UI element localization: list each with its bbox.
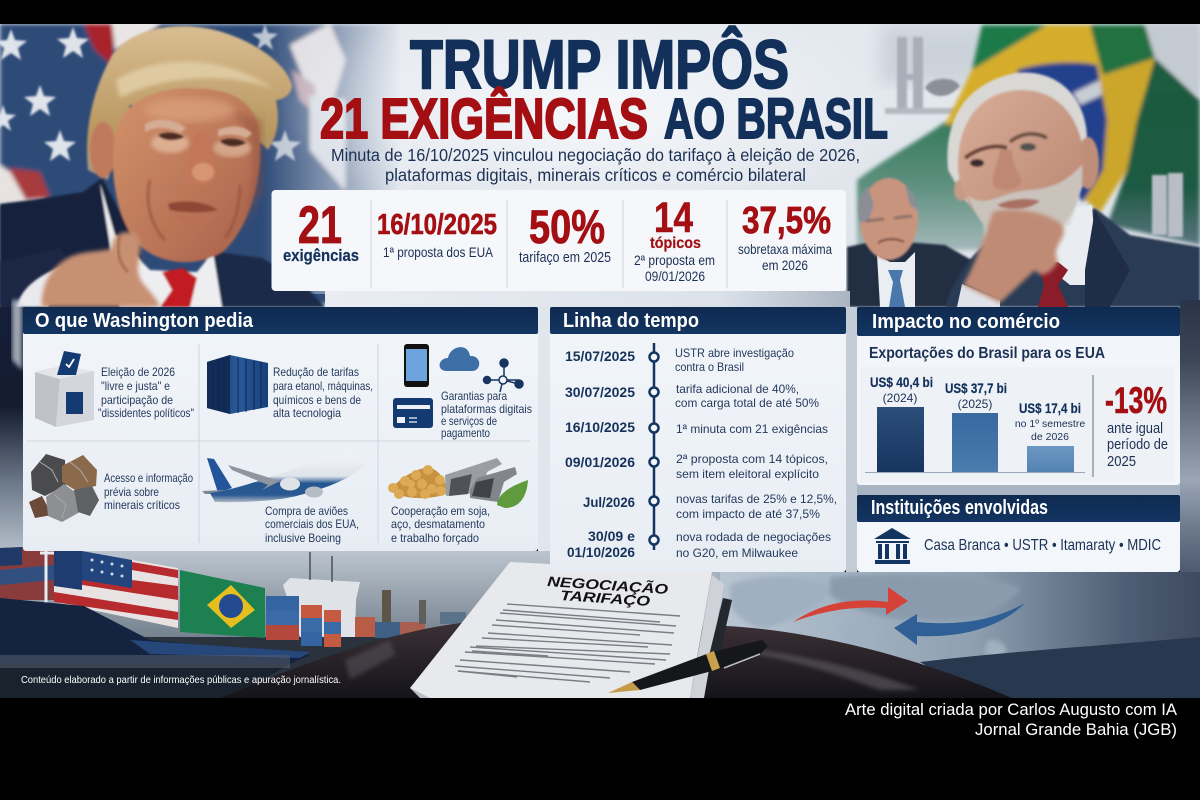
panel: Instituições envolvidas xyxy=(857,495,1180,572)
panel: O que Washington pedia xyxy=(23,307,538,551)
stat: 16/10/2025 xyxy=(377,209,497,260)
stat: 37,5%: em 2026 xyxy=(762,257,808,273)
panel heading xyxy=(550,307,846,334)
panel heading xyxy=(23,307,538,334)
stat: 14 tópicos: 2ª proposta em xyxy=(634,252,715,268)
background: Brasilia congress and Brazilian flag xyxy=(286,24,1200,252)
event: 30/07/2025: tarifa adicional de 40%, xyxy=(676,382,799,396)
stacked containers xyxy=(266,596,425,647)
icon: ballot box xyxy=(35,351,94,427)
text: plataformas xyxy=(441,389,532,440)
text: tarifas xyxy=(273,365,373,420)
icon: network xyxy=(484,359,523,392)
event: 15/07/2025 xyxy=(565,346,794,374)
bar 2025: US$ 37,7 bi xyxy=(945,380,1007,396)
stat: 14 tópicos: tópicos xyxy=(650,235,701,252)
event: 30/09 e 01/10/2026: no G20, em Milwaukee xyxy=(676,546,798,560)
callout: -13%: ante igual xyxy=(1107,420,1163,437)
event: 30/09 e 01/10/2026: 30/09 e xyxy=(588,528,635,544)
title: 21 EXIGÊNCIAS xyxy=(320,86,648,151)
event: Jul/2026: Jul/2026 xyxy=(583,494,635,510)
hull xyxy=(0,598,310,664)
text: aviões: Compra de aviões xyxy=(265,504,348,518)
pen xyxy=(608,640,768,693)
stat: 14 tópicos: 09/01/2026 xyxy=(645,268,705,284)
bar first half 2026: no 1º semestre xyxy=(1015,418,1085,430)
document: negotiation papers: TARIFAÇO xyxy=(560,587,651,609)
stat: 37,5%: 37,5% xyxy=(742,200,831,242)
text: aviões: inclusive Boeing xyxy=(265,531,341,545)
credit: Arte digital criada por Carlos Augusto com IA xyxy=(845,701,1177,719)
credit xyxy=(845,701,1177,739)
stat: 21 exigências: exigências xyxy=(283,246,359,265)
chart heading: Exportações do Brasil para os EUA xyxy=(869,345,1105,362)
document: negotiation papers xyxy=(410,562,732,698)
subtitle: plataformas digitais, minerais críticos e comércio bilateral xyxy=(385,165,806,185)
text: eleição: "dissidentes políticos" xyxy=(98,406,194,420)
event: Jul/2026: com impacto de até 37,5% xyxy=(676,507,820,521)
text: aviões xyxy=(265,504,359,545)
subtitle xyxy=(331,145,860,185)
text: tarifas: alta tecnologia xyxy=(273,406,341,420)
credit: Jornal Grande Bahia (JGB) xyxy=(975,721,1177,739)
panel: Impacto no comércio xyxy=(857,307,1180,485)
icon: soy, steel and leaf xyxy=(388,458,528,508)
text: minerais: prévia sobre xyxy=(104,485,159,499)
stat: 37,5% xyxy=(738,200,832,273)
bar 2025 xyxy=(945,380,1007,472)
panel heading: O que Washington pedia xyxy=(35,310,254,332)
text: eleição: participação de xyxy=(101,393,173,407)
lower background: ships, sea and map xyxy=(0,291,1200,698)
icon: payment card xyxy=(393,398,433,428)
bar 2024: US$ 40,4 bi xyxy=(870,374,933,390)
callout: -13%: período de xyxy=(1107,436,1168,453)
text: plataformas: plataformas digitais xyxy=(441,402,532,416)
stat: 21 exigências xyxy=(283,196,359,265)
event: 30/09 e 01/10/2026 xyxy=(567,528,831,560)
bar first half 2026: US$ 17,4 bi xyxy=(1019,400,1081,416)
stat: 16/10/2025: 16/10/2025 xyxy=(377,209,497,241)
portrait: Mauro Vieira xyxy=(847,178,975,307)
subtitle: Minuta de 16/10/2025 vinculou negociação do tarifaço à eleição de 2026, xyxy=(331,145,860,165)
hero artwork background xyxy=(0,0,1200,314)
event: 09/01/2026: 09/01/2026 xyxy=(565,454,635,470)
bar 2024 xyxy=(870,374,933,472)
text: plataformas: e serviços de xyxy=(441,414,497,428)
title: TRUMP IMPÔS xyxy=(410,26,789,103)
background: world map xyxy=(720,572,1200,666)
Brazil flag container xyxy=(180,570,265,638)
panel heading: Instituições envolvidas xyxy=(871,497,1048,519)
icon: cloud xyxy=(440,347,479,371)
title xyxy=(320,26,888,151)
text: cooperação xyxy=(391,504,490,545)
text: tarifas: para etanol, máquinas, xyxy=(273,379,373,393)
event: 15/07/2025: contra o Brasil xyxy=(675,360,744,374)
callout: -13%: 2025 xyxy=(1107,453,1136,470)
text: eleição: "livre e justa" e xyxy=(101,379,170,393)
icon: critical minerals xyxy=(29,454,99,522)
text: tarifas: químicos e bens de xyxy=(273,393,361,407)
portrait: Lula xyxy=(945,72,1200,307)
event: 16/10/2025 xyxy=(565,419,828,436)
panel heading xyxy=(857,307,1180,336)
event: 30/09 e 01/10/2026: nova rodada de negociações xyxy=(676,530,831,544)
text: minerais: Acesso e informação xyxy=(104,471,193,485)
stat: 14 tópicos: 14 xyxy=(654,194,693,242)
panel heading xyxy=(857,495,1180,522)
background: sea on the right xyxy=(920,637,1200,698)
text: cooperação: e trabalho forçado xyxy=(391,531,479,545)
text: minerais: minerais críticos xyxy=(104,498,180,512)
stat: 16/10/2025: 1ª proposta dos EUA xyxy=(383,244,494,260)
US flag container xyxy=(54,546,178,628)
document: negotiation papers: NEGOCIAÇÃO xyxy=(547,572,669,597)
callout: -13%: -13% xyxy=(1105,380,1167,421)
bar chart xyxy=(860,367,1175,482)
arrow: blue, towards the left xyxy=(894,603,1025,645)
icon: shipping container xyxy=(207,355,268,414)
title: AO BRASIL xyxy=(664,87,888,151)
event: 09/01/2026: sem item eleitoral explícito xyxy=(676,467,819,481)
event: 15/07/2025: USTR abre investigação xyxy=(675,346,794,360)
bar first half 2026: de 2026 xyxy=(1031,431,1069,443)
stat: 50%: tarifaço em 2025 xyxy=(519,250,611,266)
callout: -13% xyxy=(1105,380,1168,470)
timeline axis xyxy=(650,343,658,550)
background: American flag xyxy=(0,24,412,304)
footnote: Conteúdo elaborado a partir de informações públicas e apuração jornalística. xyxy=(21,674,341,686)
event: 16/10/2025: 1ª minuta com 21 exigências xyxy=(676,422,828,436)
stat: 50% xyxy=(519,200,611,266)
portrait: Trump xyxy=(0,26,325,310)
text: cooperação: aço, desmatamento xyxy=(391,517,485,531)
panel heading: Impacto no comércio xyxy=(872,311,1060,333)
icon: airplane xyxy=(202,455,365,502)
event: 30/07/2025 xyxy=(565,382,819,410)
bar 2024: (2024) xyxy=(883,391,917,405)
event: 09/01/2026: 2ª proposta com 14 tópicos, xyxy=(676,452,828,466)
icon: smartphone xyxy=(404,344,429,387)
event: 15/07/2025: 15/07/2025 xyxy=(565,348,635,364)
event: 30/09 e 01/10/2026: 01/10/2026 xyxy=(567,544,635,560)
text: minerais xyxy=(104,471,193,512)
event: 30/07/2025: com carga total de até 50% xyxy=(675,396,819,410)
event: Jul/2026: novas tarifas de 25% e 12,5%, xyxy=(676,492,837,506)
ship superstructure xyxy=(283,578,360,637)
text: plataformas: Garantias para xyxy=(441,389,507,403)
text: eleição xyxy=(98,365,194,420)
text: tarifas: Redução de tarifas xyxy=(273,365,359,379)
panel: Linha do tempo xyxy=(550,307,846,572)
background: dark desk xyxy=(220,622,1012,698)
stat: 37,5%: sobretaxa máxima xyxy=(738,241,832,257)
event: 30/07/2025: 30/07/2025 xyxy=(565,384,635,400)
event: 16/10/2025: 16/10/2025 xyxy=(565,419,635,435)
arrow: red, towards the right xyxy=(793,587,908,622)
text: plataformas: pagamento xyxy=(441,426,490,440)
text: aviões: comerciais dos EUA, xyxy=(265,517,359,531)
mast xyxy=(40,551,54,602)
background: container ship xyxy=(0,544,720,698)
icon: government building xyxy=(874,528,911,564)
text: eleição: Eleição de 2026 xyxy=(101,365,175,379)
bar first half 2026 xyxy=(1015,400,1085,472)
stat: 50%: 50% xyxy=(529,200,605,253)
stat: 21 exigências: 21 xyxy=(298,196,342,255)
event: 09/01/2026 xyxy=(565,452,828,481)
event: Jul/2026 xyxy=(583,492,837,521)
bar 2025: (2025) xyxy=(958,397,992,411)
panel: key numbers xyxy=(272,190,846,291)
panel heading: Linha do tempo xyxy=(563,310,699,332)
stat: 14 tópicos xyxy=(634,194,715,284)
text: cooperação: Cooperação em soja, xyxy=(391,504,490,518)
